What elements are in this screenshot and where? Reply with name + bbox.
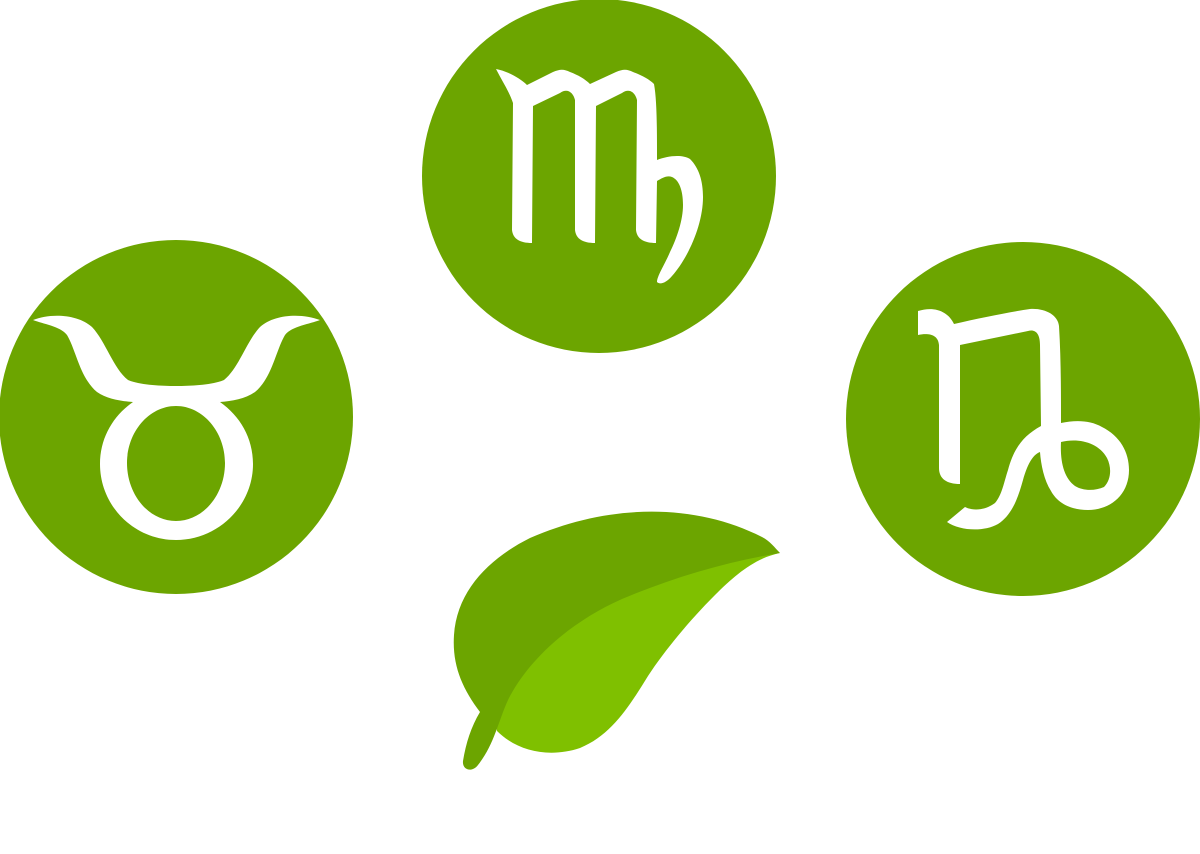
icon: Virgo glyph — [496, 69, 703, 283]
icon: Taurus glyph — [33, 316, 320, 540]
icon: leaf — [454, 512, 780, 770]
badge: Capricorn — [846, 242, 1200, 596]
badge: Virgo — [422, 0, 776, 353]
badge: Taurus — [0, 240, 353, 594]
leaf light half — [490, 553, 780, 753]
icon: Capricorn glyph — [918, 309, 1129, 529]
leaf dark half and stem — [454, 512, 780, 770]
